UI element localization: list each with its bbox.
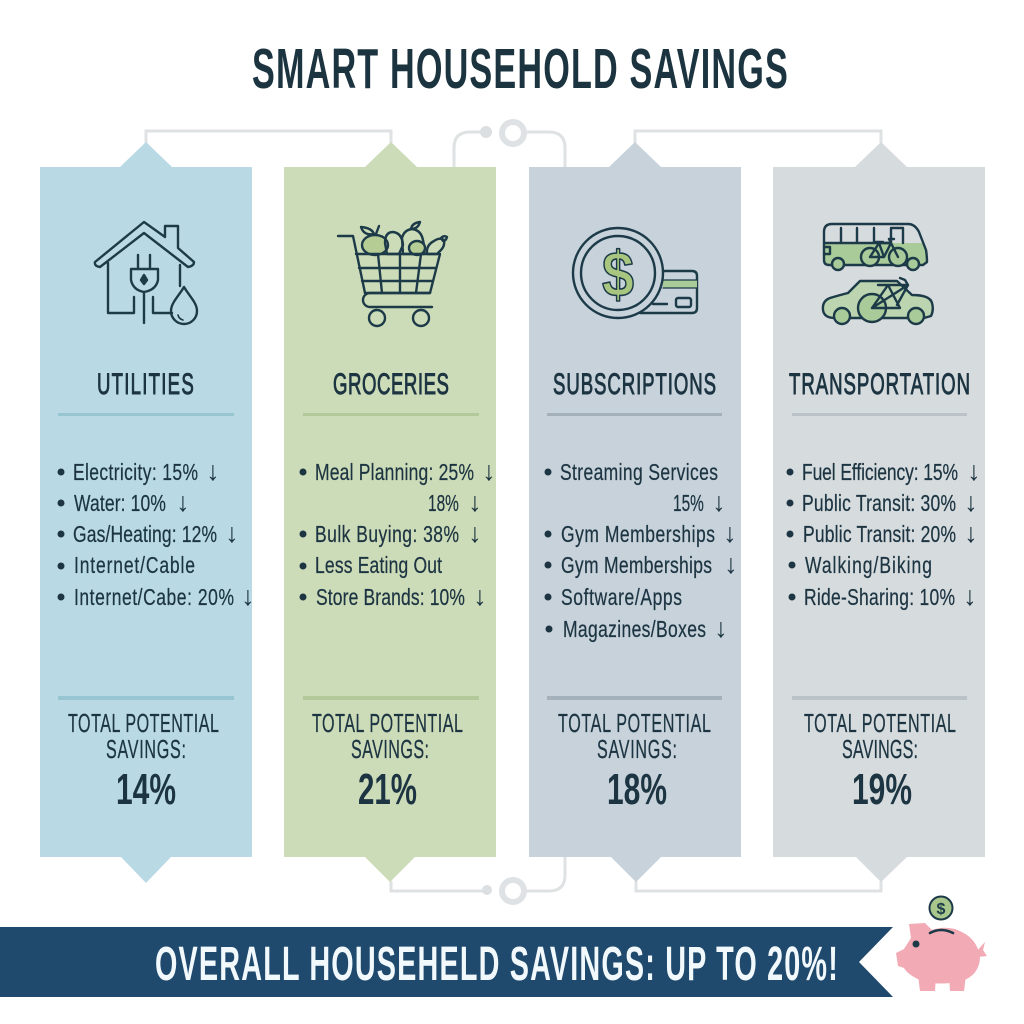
total: subscriptions xyxy=(558,708,711,814)
piggy legs and tail xyxy=(918,942,987,991)
total: utilities xyxy=(68,708,219,814)
divider top xyxy=(58,413,234,416)
icon: house with plug and water drop xyxy=(95,222,197,324)
title: SMART HOUSEHOLD SAVINGS xyxy=(252,36,788,100)
divider top xyxy=(303,413,479,416)
top and bottom connectors xyxy=(146,122,881,902)
list: utilities: ↓ xyxy=(176,487,190,517)
list: subscriptions: Magazines/Boxes xyxy=(563,618,706,643)
heading: transportation: TRANSPORTATION xyxy=(789,368,970,401)
list: groceries: Bulk Buying: 38% xyxy=(315,523,459,548)
list: groceries: ↓ xyxy=(468,518,482,548)
total: groceries xyxy=(312,708,463,814)
total: transportation xyxy=(804,708,956,814)
panel: transportation xyxy=(773,142,985,882)
total: subscriptions: TOTAL POTENTIAL xyxy=(558,708,711,738)
list: utilities: Internet/Cable xyxy=(74,554,195,579)
groceries background xyxy=(284,142,496,882)
list: groceries: 18% xyxy=(428,491,459,517)
list: transportation: Public Transit: 30% xyxy=(802,492,956,517)
divider bottom xyxy=(303,696,479,700)
list: transportation: Walking/Biking xyxy=(805,554,932,579)
divider top xyxy=(547,413,722,416)
icon: piggy bank with coin xyxy=(896,896,987,991)
list: subscriptions: Software/Apps xyxy=(561,586,682,611)
panel: subscriptions xyxy=(529,142,741,882)
list: transportation: Ride-Sharing: 10% xyxy=(804,586,955,611)
list: subscriptions: Gym Memberships xyxy=(561,523,715,548)
list: groceries: ↓ xyxy=(482,456,496,486)
list: utilities: Electricity: 15% xyxy=(73,461,198,486)
coin slot xyxy=(930,930,953,933)
total: utilities: 14% xyxy=(116,765,176,814)
utilities background xyxy=(40,142,252,883)
icon: coin and credit card xyxy=(573,228,697,318)
list: transportation: Fuel Efficiency: 15% xyxy=(802,461,958,486)
list: utilities: Gas/Heating: 12% xyxy=(73,523,217,548)
list: transportation: ↓ xyxy=(964,518,978,548)
list: transportation: Public Transit: 20% xyxy=(803,523,956,548)
icon: bus with bicycle xyxy=(824,224,927,270)
total: groceries: SAVINGS: xyxy=(351,734,429,764)
list: transportation xyxy=(786,456,981,611)
panel: utilities xyxy=(40,142,255,883)
total: utilities: SAVINGS: xyxy=(106,734,186,764)
list: transportation: ↓ xyxy=(967,456,981,486)
list: subscriptions: Streaming Services xyxy=(560,461,718,486)
list: utilities xyxy=(58,456,255,611)
list: subscriptions: ↓ xyxy=(712,487,726,517)
list: utilities: ↓ xyxy=(225,518,239,548)
banner text: OVERALL HOUSEHELD SAVINGS: UP TO 20%! xyxy=(155,938,838,991)
list: subscriptions: 15% xyxy=(673,491,704,517)
list: groceries: Less Eating Out xyxy=(315,554,442,579)
total: utilities: TOTAL POTENTIAL xyxy=(68,708,219,738)
total: transportation: 19% xyxy=(852,765,912,814)
coin: $ xyxy=(937,901,946,918)
heading: utilities: UTILITIES xyxy=(97,368,194,401)
list: transportation: ↓ xyxy=(964,487,978,517)
total: groceries: 21% xyxy=(358,765,417,814)
piggy eye xyxy=(912,940,920,948)
list: subscriptions: ↓ xyxy=(714,613,728,643)
list: utilities: ↓ xyxy=(206,456,220,486)
list: utilities: Internet/Cabe: 20% xyxy=(74,586,234,611)
piggy body xyxy=(896,923,980,984)
total: transportation: TOTAL POTENTIAL xyxy=(804,708,956,738)
icon: car with bicycle xyxy=(823,278,933,324)
list: subscriptions xyxy=(544,461,738,643)
list: groceries xyxy=(300,456,496,611)
list: utilities: ↓ xyxy=(241,581,255,611)
divider bottom xyxy=(547,696,722,700)
list: subscriptions: ↓ xyxy=(723,518,737,548)
total: groceries: TOTAL POTENTIAL xyxy=(312,708,463,738)
subscriptions background xyxy=(529,142,741,882)
transportation background xyxy=(773,142,985,882)
list: transportation: ↓ xyxy=(963,581,977,611)
banner ribbon xyxy=(0,927,893,997)
heading: subscriptions: SUBSCRIPTIONS xyxy=(553,368,716,401)
banner xyxy=(0,927,893,997)
list: groceries: ↓ xyxy=(468,487,482,517)
total: subscriptions: 18% xyxy=(607,765,667,814)
divider top xyxy=(792,413,967,416)
list: utilities: Water: 10% xyxy=(74,492,166,517)
panel: groceries xyxy=(284,142,496,882)
list: groceries: Meal Planning: 25% xyxy=(315,461,474,486)
divider bottom xyxy=(58,696,234,700)
list: groceries: ↓ xyxy=(473,581,487,611)
list: subscriptions: Gym Memberships xyxy=(561,554,712,579)
list: subscriptions: ↓ xyxy=(724,549,738,579)
divider bottom xyxy=(792,696,967,700)
icon: coin and credit card: $ xyxy=(602,238,634,310)
list: groceries: Store Brands: 10% xyxy=(316,586,465,611)
total: subscriptions: SAVINGS: xyxy=(597,734,677,764)
total: transportation: SAVINGS: xyxy=(842,734,918,764)
icon: shopping cart with produce xyxy=(338,222,447,326)
heading: groceries: GROCERIES xyxy=(333,368,449,401)
